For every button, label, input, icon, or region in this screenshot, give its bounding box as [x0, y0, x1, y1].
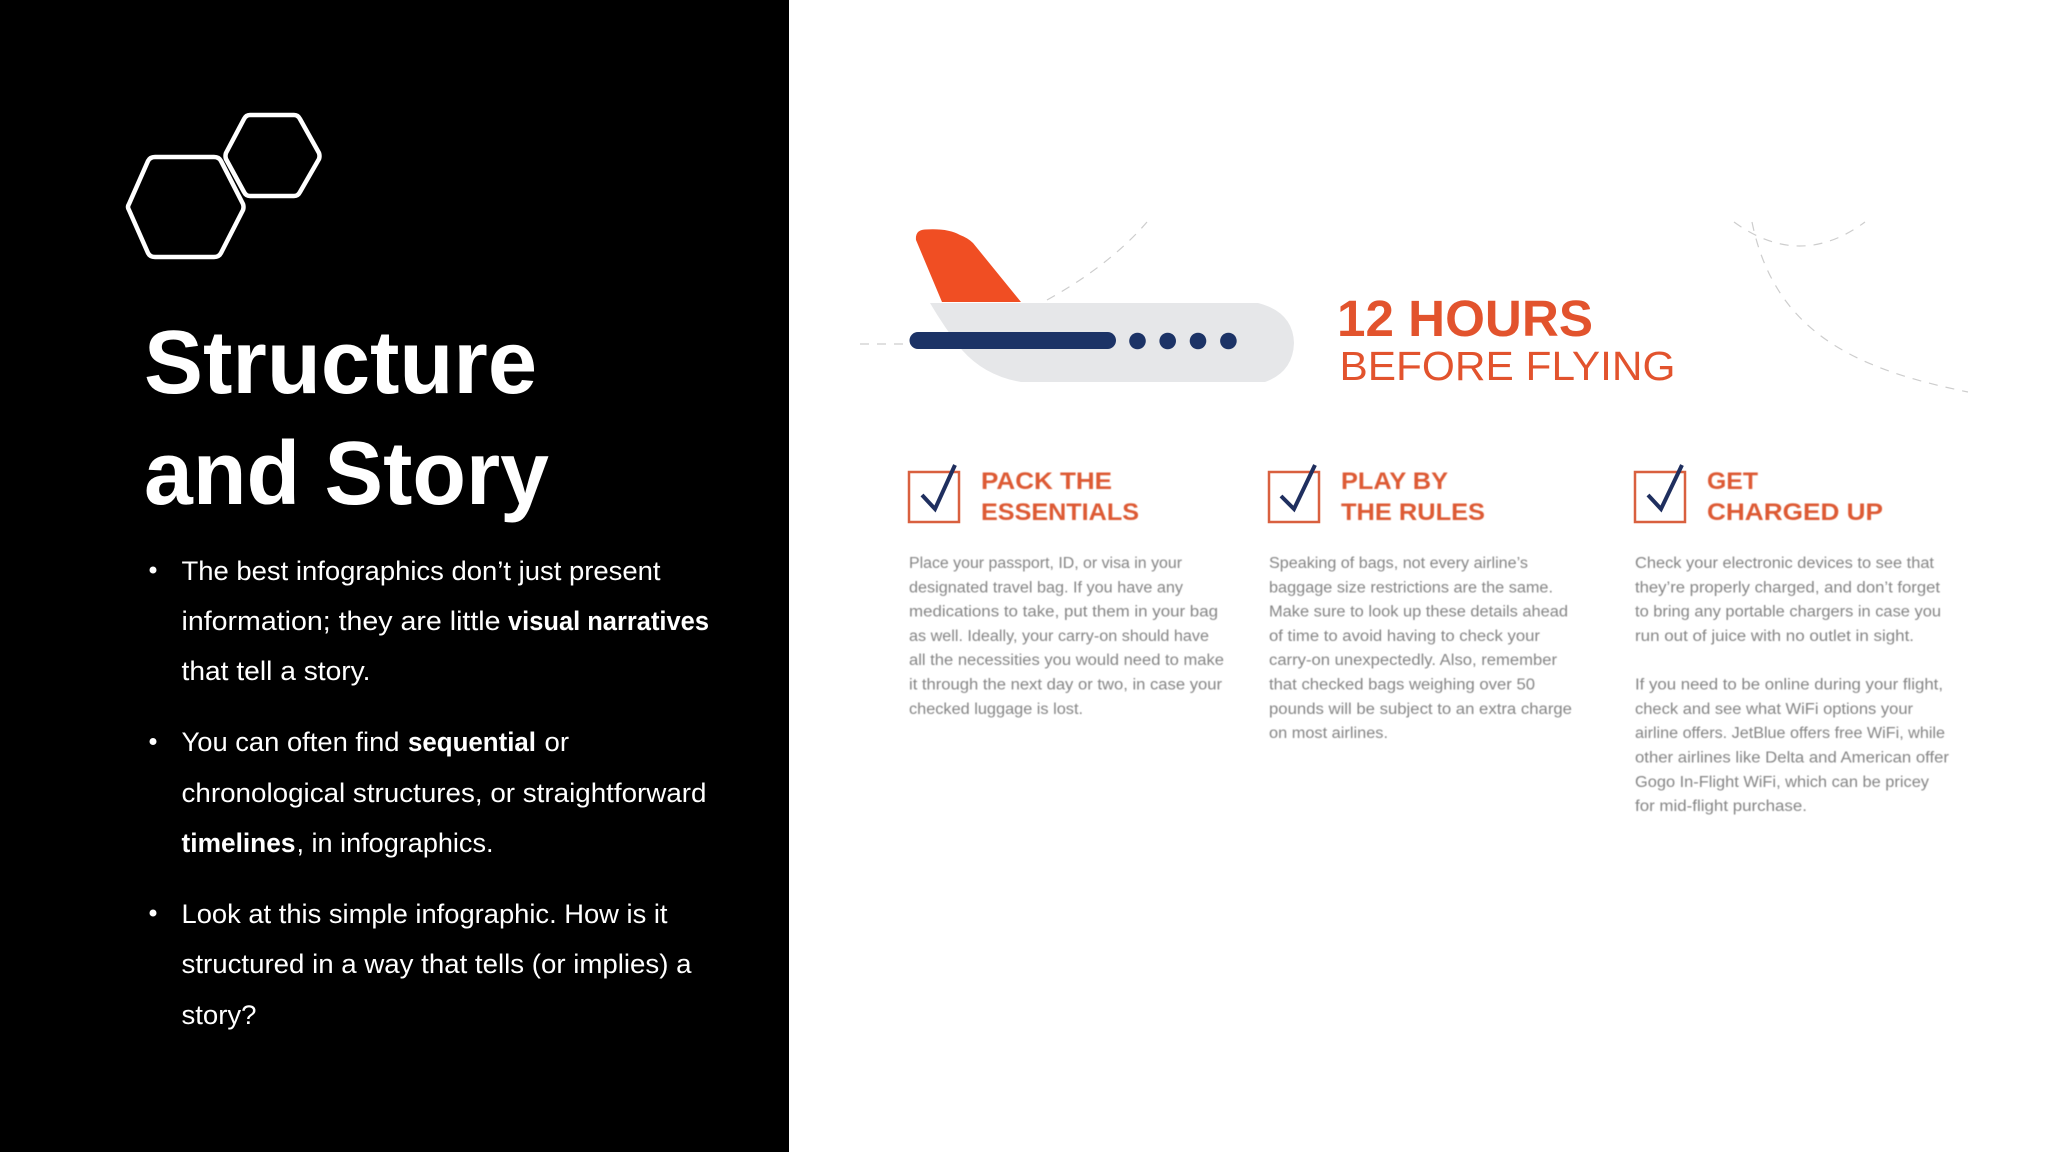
bullet list: third point: story? [182, 1000, 256, 1030]
body text: all the necessities you would need to make [909, 652, 1224, 669]
body text [1269, 555, 1572, 742]
body text: of time to avoid having to check your [1269, 628, 1540, 645]
body text: run out of juice with no outlet in sight. [1635, 628, 1914, 645]
body text: Place your passport, ID, or visa in your [909, 555, 1182, 572]
panel: left black slide panel [0, 0, 789, 1152]
heading: THE RULES [1341, 499, 1485, 526]
body text: to bring any portable chargers in case you [1635, 604, 1941, 620]
body text: check and see what WiFi options your [1635, 701, 1913, 718]
bullet list: second point: chronological structures, or straightforward [182, 778, 706, 808]
title [144, 313, 549, 524]
icon: checkbox [1269, 465, 1319, 522]
bullet list: second point: sequential [408, 727, 536, 757]
body text: other airlines like Delta and American offer [1635, 750, 1949, 766]
bullet list: second point: You can often find [182, 727, 400, 757]
body text: carry-on unexpectedly. Also, remember [1269, 652, 1557, 669]
heading: GET [1707, 468, 1758, 495]
body text: airline offers. JetBlue offers free WiFi, while [1635, 725, 1945, 742]
bullet list: third point: structured in a way that tells (or implies) a [182, 949, 693, 979]
body text: Gogo In-Flight WiFi, which can be pricey [1635, 774, 1929, 791]
heading [981, 468, 1139, 526]
bullet list: first point: visual narratives [508, 606, 709, 636]
heading [1707, 468, 1883, 526]
body text [1635, 555, 1949, 815]
body text: checked luggage is lost. [909, 701, 1083, 718]
bullet list: second point [150, 727, 706, 858]
icon: checkbox [909, 465, 959, 522]
body text: on most airlines. [1269, 725, 1388, 742]
heading [1341, 468, 1485, 526]
title: and Story [144, 424, 549, 524]
title: Structure [144, 313, 537, 413]
heading: PLAY BY [1341, 468, 1448, 495]
heading: PACK THE [981, 468, 1112, 495]
heading: CHARGED UP [1707, 499, 1883, 526]
bullet list: second point: , in infographics. [296, 828, 494, 858]
body text: If you need to be online during your flight, [1635, 676, 1943, 694]
bullet list: third point [150, 899, 693, 1030]
body text: for mid-flight purchase. [1635, 798, 1807, 815]
body text: as well. Ideally, your carry-on should have [909, 628, 1209, 645]
bullet list: second point: timelines [182, 828, 296, 858]
icon: two outlined hexagons [128, 115, 320, 257]
bullet list: first point [150, 556, 709, 686]
panel: travel infographic [860, 222, 1968, 815]
headline: 12 hours before flying [1337, 290, 1676, 389]
body text [909, 555, 1224, 718]
bullet list: third point: Look at this simple infographic. How is it [182, 899, 668, 929]
body text: they’re properly charged, and don’t forget [1635, 580, 1941, 596]
bullet list: first point: The best infographics don’t just present [182, 556, 661, 586]
body text: Make sure to look up these details ahead [1269, 604, 1568, 620]
column: play by the rules [1269, 465, 1572, 742]
bullet list: second point: or [544, 727, 569, 757]
bullet list: first point: that tell a story. [182, 656, 370, 686]
body text: Speaking of bags, not every airline’s [1269, 555, 1528, 572]
body text: pounds will be subject to an extra charge [1269, 701, 1572, 718]
column: pack the essentials [909, 465, 1224, 718]
body text: it through the next day or two, in case your [909, 676, 1222, 694]
bullet list: first point: information; they are little [182, 606, 500, 636]
icon: checkbox [1635, 465, 1685, 522]
body text: baggage size restrictions are the same. [1269, 580, 1553, 596]
body text: that checked bags weighing over 50 [1269, 676, 1535, 694]
headline: 12 hours before flying: 12 HOURS [1337, 290, 1593, 347]
body text: designated travel bag. If you have any [909, 580, 1183, 596]
icon: airplane [910, 229, 1294, 382]
heading: ESSENTIALS [981, 499, 1139, 526]
column: get charged up [1635, 465, 1949, 815]
headline: 12 hours before flying: BEFORE FLYING [1340, 343, 1676, 389]
body text: medications to take, put them in your bag [909, 604, 1218, 620]
body text: Check your electronic devices to see that [1635, 555, 1935, 572]
dashed flight paths [860, 222, 1968, 392]
